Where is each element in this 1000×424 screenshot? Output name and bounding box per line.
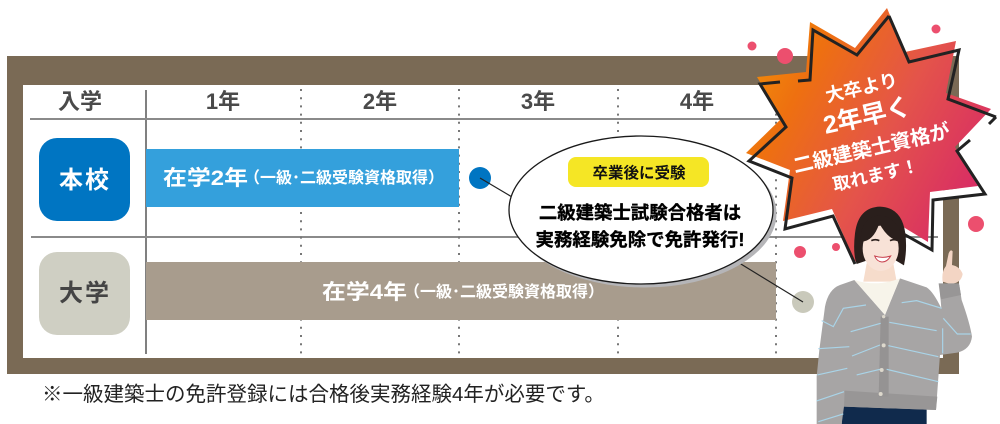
year header row: 入学 bbox=[58, 89, 102, 114]
decorative pink dots bbox=[748, 24, 984, 258]
starburst text: 大卒より bbox=[823, 69, 900, 106]
label: 本校: 本校 bbox=[59, 167, 111, 194]
inner white top bbox=[854, 278, 900, 315]
starburst text bbox=[791, 69, 952, 195]
starburst callout bbox=[746, 8, 996, 264]
bar: 大学 4 years bbox=[146, 262, 776, 320]
bar: 本校 2 years: 在学2年 bbox=[163, 167, 248, 190]
bar: 本校 2 years: （一級･二級受験資格取得） bbox=[244, 168, 444, 187]
person pointing up bbox=[817, 207, 972, 424]
eyes bbox=[871, 237, 898, 243]
footnote: ※一級建築士の免許登録には合格後実務経験4年が必要です。 bbox=[42, 383, 605, 406]
table grid bbox=[30, 89, 943, 354]
face bbox=[863, 226, 899, 271]
stripes bbox=[817, 301, 971, 422]
year header row: 2年 bbox=[363, 89, 397, 114]
raised hand bbox=[942, 250, 963, 284]
label: 本校 bbox=[39, 138, 130, 221]
buttons bbox=[879, 315, 886, 396]
starburst text: 2年早く bbox=[821, 93, 914, 140]
bubble tag: after graduation: 卒業後に受験 bbox=[592, 163, 686, 182]
year header row bbox=[58, 89, 714, 114]
label: 大学 bbox=[39, 252, 130, 335]
year header row: 3年 bbox=[521, 89, 555, 114]
jeans bbox=[842, 403, 927, 424]
starburst text: 二級建築士資格が bbox=[791, 118, 952, 178]
label: 大学: 大学 bbox=[59, 280, 111, 307]
hair back bbox=[854, 207, 906, 265]
bubble tag: after graduation bbox=[568, 157, 709, 187]
speech bubble bbox=[509, 136, 776, 288]
connector dot: 大学 bbox=[736, 261, 814, 313]
cardigan bbox=[817, 278, 972, 424]
bangs bbox=[861, 215, 901, 242]
connector dot: 本校 bbox=[469, 167, 512, 197]
year header row: 4年 bbox=[680, 89, 714, 114]
bar: 大学 4 years: 在学4年 bbox=[322, 281, 407, 304]
bubble message: 実務経験免除で免許発行! bbox=[536, 229, 744, 250]
bubble message bbox=[536, 202, 744, 250]
bar: 大学 4 years: （一級･二級受験資格取得） bbox=[404, 282, 604, 301]
bubble message: 二級建築士試験合格者は bbox=[539, 202, 741, 223]
smile bbox=[875, 256, 891, 262]
year header row: 1年 bbox=[206, 89, 240, 114]
panel: timeline frame bbox=[7, 56, 959, 374]
neck bbox=[863, 263, 897, 282]
starburst text: 取れます！ bbox=[831, 156, 921, 195]
ribbed cuff and hem bbox=[939, 283, 961, 299]
bar: 本校 2 years bbox=[146, 149, 459, 207]
